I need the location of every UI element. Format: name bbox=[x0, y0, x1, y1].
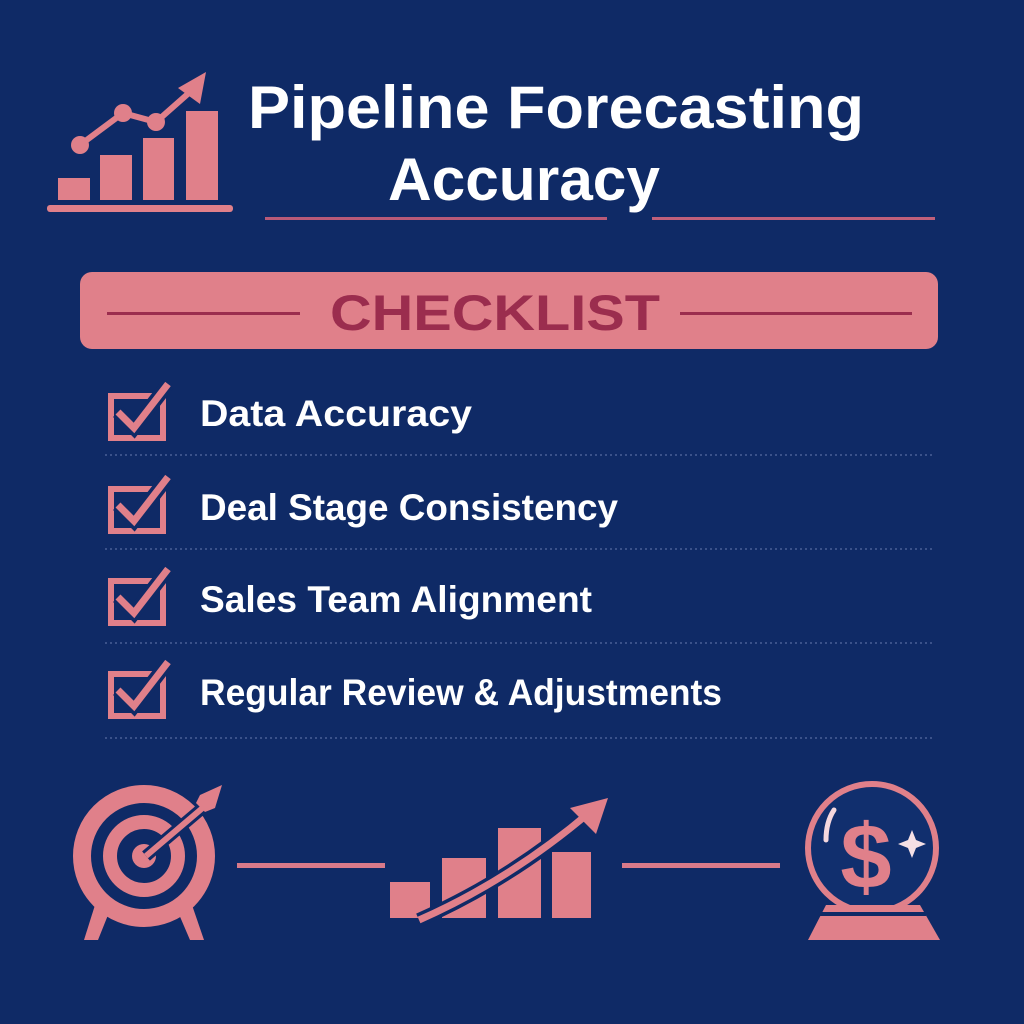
icon: crystal ball with dollar: $ bbox=[840, 806, 892, 908]
icon: target bbox=[82, 785, 222, 940]
title: Accuracy bbox=[388, 146, 661, 213]
icon: crystal ball with dollar bbox=[808, 784, 940, 940]
item 2 bbox=[111, 477, 618, 531]
icon: growth chart bbox=[47, 72, 233, 212]
connector line 1 bbox=[237, 863, 385, 868]
item 1 bbox=[111, 384, 472, 438]
title: Pipeline Forecasting bbox=[248, 74, 864, 141]
checklist header bar bbox=[80, 272, 938, 349]
item 2: Deal Stage Consistency bbox=[200, 487, 618, 528]
item 4: Regular Review & Adjustments bbox=[200, 672, 722, 713]
checklist header bar: CHECKLIST bbox=[330, 285, 660, 341]
item 3 bbox=[111, 569, 592, 623]
title bbox=[248, 74, 864, 213]
checklist items bbox=[105, 384, 935, 738]
icon: bar chart with arrow bbox=[390, 798, 608, 920]
connector line 2 bbox=[622, 863, 780, 868]
item 4 bbox=[111, 662, 722, 716]
item 3: Sales Team Alignment bbox=[200, 579, 592, 620]
item 1: Data Accuracy bbox=[200, 393, 472, 434]
